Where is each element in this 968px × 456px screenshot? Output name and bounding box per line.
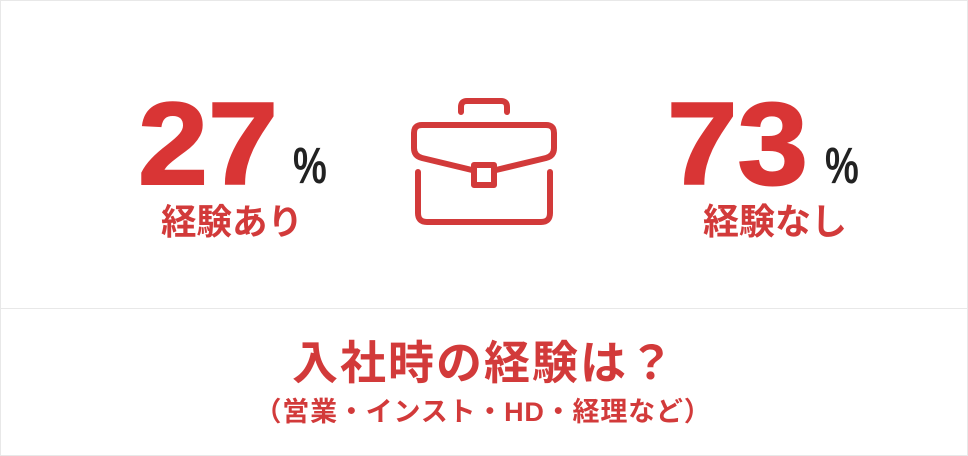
label: not experienced: 経験なし [703,201,847,242]
stat: 73% without experience [667,78,859,242]
heading: 入社時の経験は？ [292,337,676,389]
icon: briefcase [414,101,554,222]
subheading: （営業・インスト・HD・経理など） [254,397,712,427]
number 73: 73 [667,78,808,209]
percent sign: % [293,139,327,194]
number 27: 27 [138,78,278,209]
percent sign: % [825,139,859,194]
label: experienced: 経験あり [161,202,303,242]
stat: 27% with experience [138,78,327,242]
caption block [254,337,712,427]
